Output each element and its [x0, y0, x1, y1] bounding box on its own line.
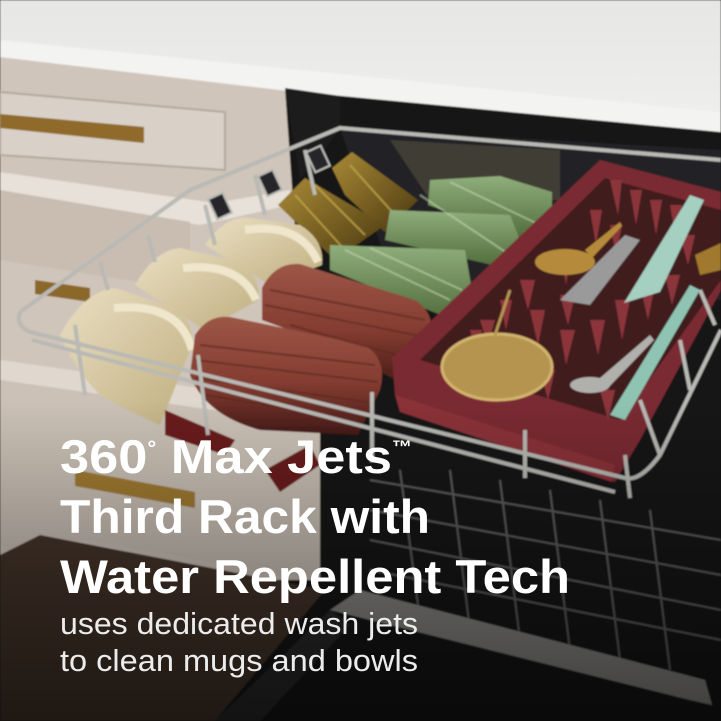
interior back wall [340, 128, 721, 300]
handle lower [75, 470, 195, 508]
subheading [60, 606, 418, 678]
silver fork [560, 235, 640, 305]
door bottom trim [330, 590, 712, 705]
heading [60, 430, 570, 603]
countertop [0, 0, 721, 132]
rack clips [208, 146, 330, 219]
dark gradient behind caption [0, 400, 721, 721]
mugs [60, 218, 322, 425]
drawer face top [0, 92, 225, 170]
gold utensil right edge [695, 243, 721, 275]
mint fork handle [610, 285, 700, 420]
burgundy silverware basket [392, 160, 721, 482]
lower rack wires [370, 470, 721, 670]
heading line 3: Water Repellent Tech [60, 550, 570, 603]
gold strainer [442, 290, 552, 400]
heading line 1: ° [147, 438, 156, 460]
red parts under rack [165, 410, 235, 455]
wire rack [19, 128, 721, 498]
heading line 1: Max Jets [156, 430, 392, 483]
silver spoon [570, 335, 654, 393]
heading line 2: Third Rack with [60, 490, 430, 543]
heading line 1: 360 [60, 430, 138, 483]
rose tumblers [190, 264, 432, 435]
basket pegs [470, 180, 695, 420]
handle middle [35, 280, 90, 302]
cabinet lower section [0, 370, 320, 580]
gold spoon [535, 222, 622, 275]
subheading line 2: to clean mugs and bowls [60, 643, 418, 678]
mint knife handle [624, 195, 704, 303]
subheading line 1: uses dedicated wash jets [60, 606, 418, 641]
floor [0, 535, 325, 721]
mug handles [114, 229, 318, 350]
heading line 1: ™ [392, 437, 412, 457]
green glasses [330, 176, 552, 322]
amber glasses [278, 152, 418, 260]
handle upper [0, 114, 144, 143]
cabinet [0, 55, 320, 580]
dishwasher side edge [285, 88, 340, 180]
tumbler ribs [195, 290, 430, 420]
